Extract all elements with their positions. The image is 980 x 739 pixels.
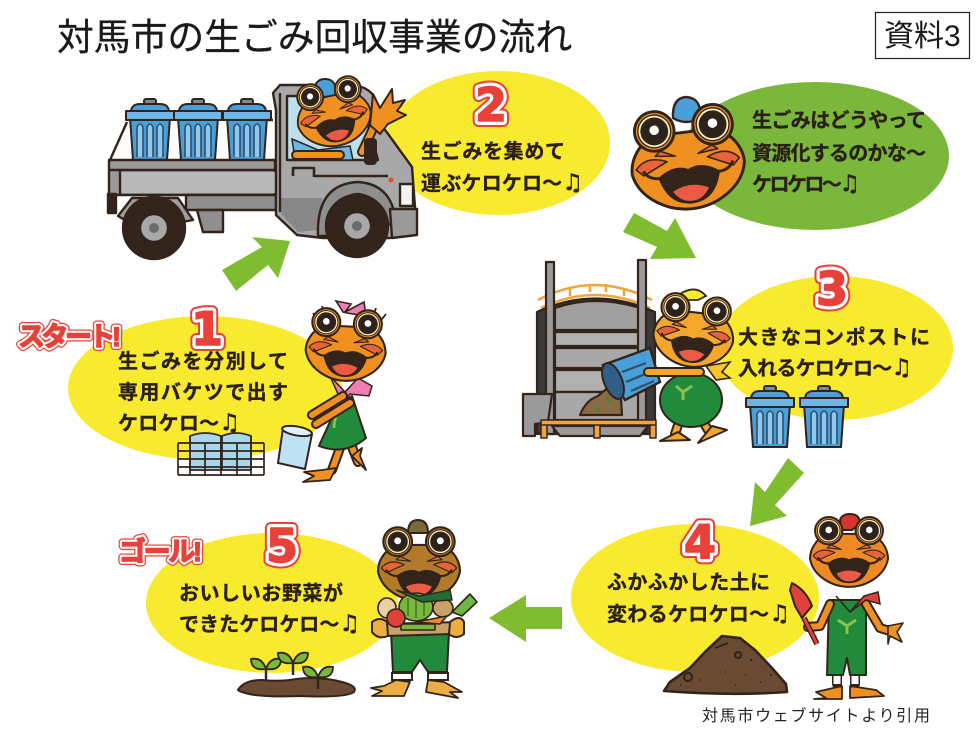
frog 3 with tilted bin — [598, 289, 737, 443]
bubble 5 — [146, 533, 398, 673]
step number 5: 5 — [266, 519, 298, 573]
arrow: 2 to 3 — [623, 213, 696, 259]
fender — [318, 182, 396, 236]
door handle — [293, 168, 388, 177]
goal label: ゴール! — [119, 536, 202, 567]
soil pile — [664, 636, 787, 694]
bubble 1 — [68, 316, 342, 460]
text: step 2 — [421, 139, 583, 196]
legs — [832, 672, 842, 684]
text: step 3: 入れるケロケロ〜♫ — [738, 355, 912, 381]
step number 3: 3 — [816, 262, 848, 316]
text: step 5: できたケロケロ〜♫ — [179, 611, 360, 637]
seedlings — [238, 653, 355, 696]
text: step 1 — [118, 349, 288, 436]
truck bins — [126, 99, 271, 160]
arrow: 3 to 4 — [750, 458, 804, 526]
cap — [313, 79, 336, 98]
text: step 5 — [179, 581, 360, 637]
vegetables — [378, 593, 477, 630]
step number 2: 2 — [475, 78, 507, 132]
scarf — [330, 376, 372, 403]
text: step 3 — [738, 326, 930, 381]
eyelashes — [313, 306, 386, 324]
start label: スタート! — [18, 322, 121, 352]
step number 4: 4 — [684, 515, 716, 569]
text: step 3: 大きなコンポストに — [738, 326, 930, 349]
scarf — [292, 139, 353, 160]
truck cab — [273, 85, 415, 238]
text: step 1: 生ごみを分別して — [118, 349, 288, 373]
bins near bubble 3 — [746, 386, 848, 447]
text: question: ケロケロ〜♫ — [752, 171, 860, 197]
bubble 3 — [717, 276, 953, 420]
step number 3: 3 — [816, 262, 848, 316]
text: step 1: ケロケロ〜♫ — [118, 410, 240, 436]
document label: 資料3: 資料3 — [884, 20, 961, 53]
apron — [391, 632, 449, 672]
text: step 4 — [607, 571, 790, 627]
start label: スタート! — [18, 322, 121, 352]
frog head: question — [625, 97, 749, 215]
step number 4: 4 — [684, 515, 716, 569]
arrow: 1 to 2 — [222, 237, 290, 291]
goal label: ゴール! — [119, 536, 202, 567]
text: step 4: 変わるケロケロ〜♫ — [607, 601, 790, 627]
bubble 4 — [571, 524, 819, 672]
text: question — [752, 108, 926, 197]
compost machine — [523, 260, 656, 438]
hat — [408, 520, 428, 533]
overalls — [827, 600, 866, 675]
frog 1 with bucket — [278, 301, 388, 482]
frog in truck — [290, 73, 406, 165]
bow — [336, 301, 366, 316]
waving hand — [370, 89, 406, 134]
bubble: question — [681, 82, 949, 230]
shovel — [790, 583, 812, 618]
title: 対馬市の生ごみ回収事業の流れ — [57, 17, 572, 58]
head — [304, 307, 388, 383]
waving arm — [362, 122, 376, 152]
step number 1: 1 — [191, 302, 223, 356]
step number 1: 1 — [191, 302, 223, 356]
scarf — [836, 592, 880, 612]
goal label: ゴール! — [119, 536, 202, 567]
text: step 1: 専用バケツで出す — [118, 381, 288, 404]
wheels — [123, 195, 388, 259]
start label: スタート! — [18, 322, 121, 352]
truck lights — [400, 184, 413, 206]
truck window — [287, 96, 378, 160]
source caption: 対馬市ウェブサイトより引用 — [702, 706, 930, 725]
legs — [332, 448, 340, 470]
arms — [312, 396, 343, 415]
step number 2: 2 — [475, 78, 507, 132]
arrow: 4 to 5 — [489, 595, 562, 642]
text: step 2: 運ぶケロケロ〜♫ — [421, 170, 583, 196]
apron — [319, 396, 366, 450]
hands — [372, 618, 464, 637]
text: step 4: ふかふかした土に — [607, 571, 770, 594]
bucket — [278, 424, 313, 469]
frog 4 with shovel — [790, 514, 903, 699]
step number 4: 4 — [684, 515, 716, 569]
crate with buckets — [178, 433, 264, 475]
step number 3: 3 — [816, 262, 848, 316]
text: step 2: 生ごみを集めて — [421, 139, 565, 163]
bubble 2 — [386, 71, 610, 215]
truck bed — [109, 160, 275, 195]
tray — [377, 622, 462, 636]
cap — [840, 514, 860, 530]
document label: 資料3 — [876, 12, 970, 58]
truck rails — [110, 120, 273, 160]
step number 5: 5 — [266, 519, 298, 573]
step number 5: 5 — [266, 519, 298, 573]
legs — [392, 673, 448, 680]
truck illustration — [108, 85, 417, 259]
arm on sill — [296, 150, 340, 160]
text: question: 資源化するのかな〜 — [752, 142, 926, 165]
frog 5 with vegetables — [371, 520, 477, 698]
scarf — [396, 590, 452, 602]
step number 1: 1 — [191, 302, 223, 356]
step number 2: 2 — [475, 78, 507, 132]
text: question: 生ごみはどうやって — [752, 108, 926, 132]
text: step 5: おいしいお野菜が — [179, 581, 343, 605]
arms — [808, 604, 830, 627]
